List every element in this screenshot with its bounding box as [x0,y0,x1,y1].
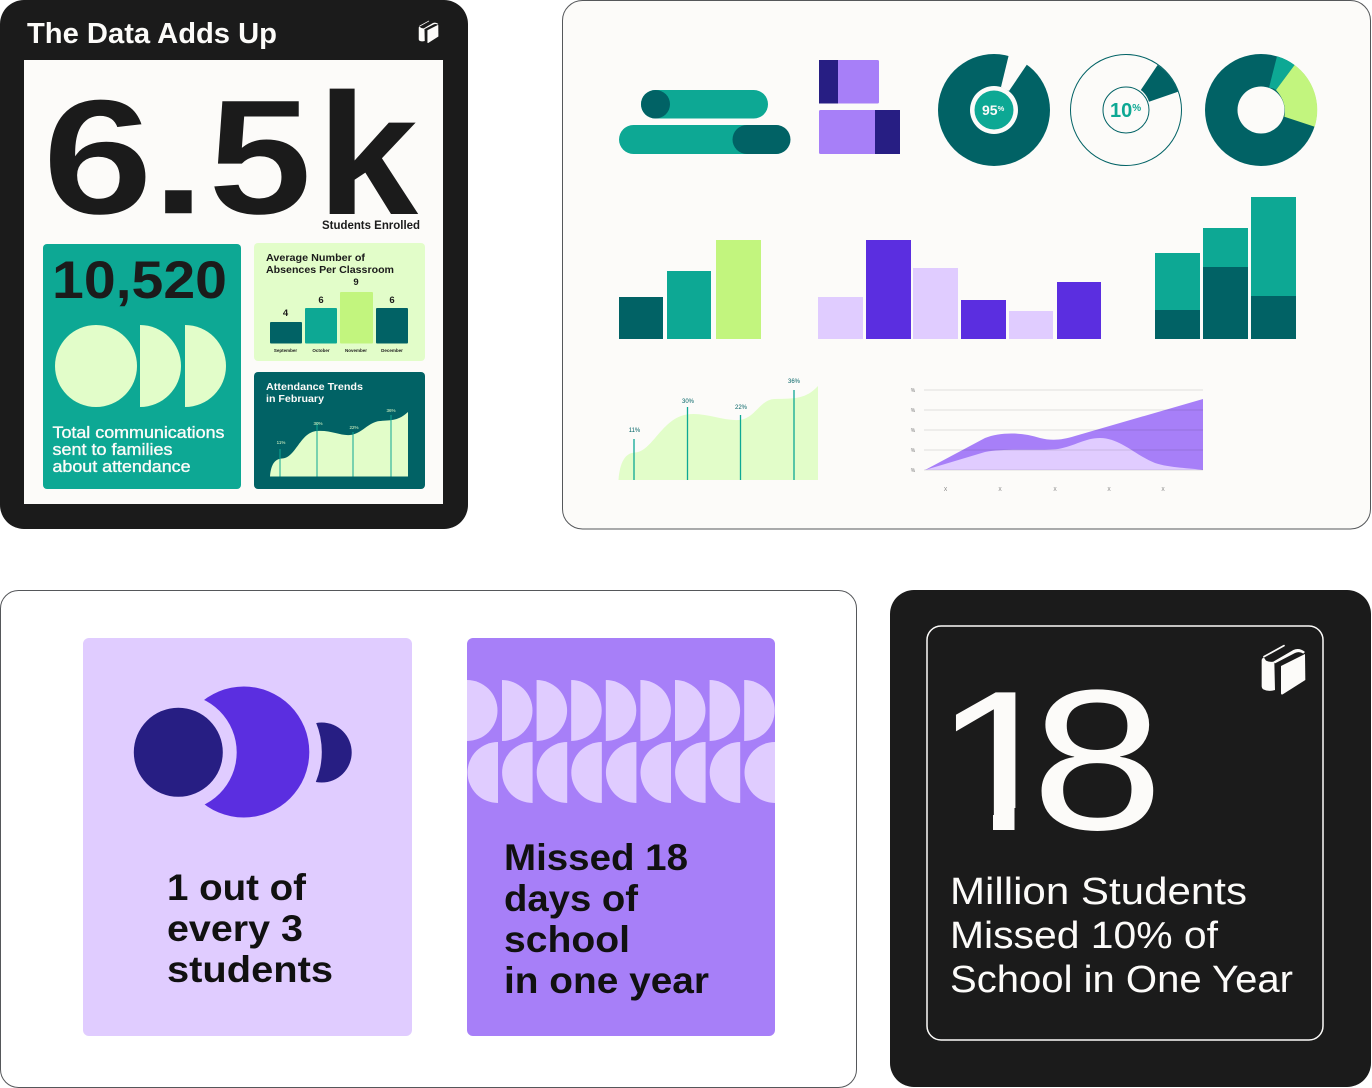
bars [270,292,408,344]
description text: Total communications [52,424,224,442]
text: 1 out of every 3 students: every 3 [167,908,303,949]
donut: 10% [1070,54,1182,166]
label: 95%: 95 [982,102,998,118]
icon: book large [1262,646,1305,695]
area chart: green [618,379,818,480]
big stat: 6.5k: 5 [207,64,312,249]
marker labels: 22% [349,425,359,430]
text: missed 18 days of school in one year: days of [504,878,639,919]
label: 10%: % [1132,103,1141,114]
caption: students enrolled: Students Enrolled [322,220,420,232]
chart title: Average Number of [266,252,366,264]
axis labels: % [911,388,916,394]
label: 95%: % [998,104,1005,113]
label: 10%: 10 [1110,100,1132,122]
description text: sent to families [52,441,172,459]
axis labels: % [911,428,916,434]
marker labels: 11% [277,440,285,445]
big stat: 6.5k: 6. [42,65,206,250]
chart title: in February [266,393,324,405]
marker labels: 36% [386,408,396,413]
text: 1 out of every 3 students: 1 out of [167,867,307,908]
description text [950,871,1293,1001]
pill progress bars [619,90,790,154]
month labels: December [381,348,403,353]
bar chart: stacked [1155,197,1296,339]
grid lines [924,390,1203,470]
axis labels: % [911,468,916,474]
axis labels: % [911,448,916,454]
marker lines [634,390,794,480]
text: 1 out of every 3 students: students [167,949,333,990]
card: total communications [43,244,241,489]
heading: The Data Adds Up: The Data Adds Up [27,18,277,50]
half circle pattern [467,680,775,803]
chart title: Absences Per Classroom [266,264,394,276]
marker labels: 11% [629,428,641,434]
chart title: Attendance Trends [266,381,363,393]
bar chart: six bars [818,240,1101,339]
description text: School in One Year [950,959,1293,1001]
panel: student absence cards [0,590,856,1088]
description text [52,424,224,476]
card: average absences bar chart [254,243,425,361]
marker lines [280,415,391,476]
marker labels [629,379,801,434]
big stat: 6.5k: k [317,57,418,251]
axis labels: X [944,487,948,493]
marker labels: 36% [788,379,801,385]
text: missed 18 days of school in one year: Missed 18 [504,837,688,878]
axis labels: % [911,408,916,414]
text: missed 18 days of school in one year [504,837,709,1001]
axis labels: X [1161,487,1165,493]
text: missed 18 days of school in one year: school [504,919,630,960]
axis labels: X [1107,487,1111,493]
marker labels: 30% [682,399,695,405]
description text: Million Students [950,871,1247,913]
area chart [270,412,408,476]
panel: 18 million students [890,590,1371,1087]
panel: chart component library [562,0,1370,529]
text: 1 out of every 3 students [167,867,333,990]
axis labels [911,388,1165,493]
month labels [274,348,403,353]
marker labels: 22% [735,405,748,411]
card: 1 out of every 3 students [83,638,412,1036]
axis labels: X [1053,487,1057,493]
stat: 10,520: 10,520 [52,251,227,310]
card: missed 18 days [467,638,775,1036]
marker labels [277,408,396,445]
bar chart: three bars [619,240,761,339]
axis labels: X [998,487,1002,493]
block progress bars [819,60,900,154]
chart title [266,381,363,405]
big stat: 6.5k [42,57,418,251]
area chart: purple [911,388,1203,493]
icon: book small [419,21,438,43]
month labels: September [274,348,297,353]
big stat: 18: 1 [932,650,1068,873]
bar values [283,277,395,319]
chart title [266,252,394,276]
text: missed 18 days of school in one year: in one year [504,960,709,1001]
month labels: November [345,348,367,353]
donut: 95% [938,50,1050,166]
big stat: 18 [932,648,1164,873]
bar values: 6 [389,295,395,306]
panel: the data adds up dashboard [0,0,468,529]
bar values: 9 [353,277,359,288]
inner white sheet [24,60,443,504]
big stat: 18: 8 [1031,648,1164,872]
description text: Missed 10% of [950,915,1218,957]
month labels: October [312,348,330,353]
icon: circle and half circles [55,325,226,407]
donut: segmented [1205,54,1317,166]
bar values: 6 [318,295,324,306]
marker labels: 30% [313,421,323,426]
icon: overlapping circles [120,674,352,830]
card: attendance trends [254,372,425,489]
bar values: 4 [283,308,289,319]
description text: about attendance [52,458,190,476]
